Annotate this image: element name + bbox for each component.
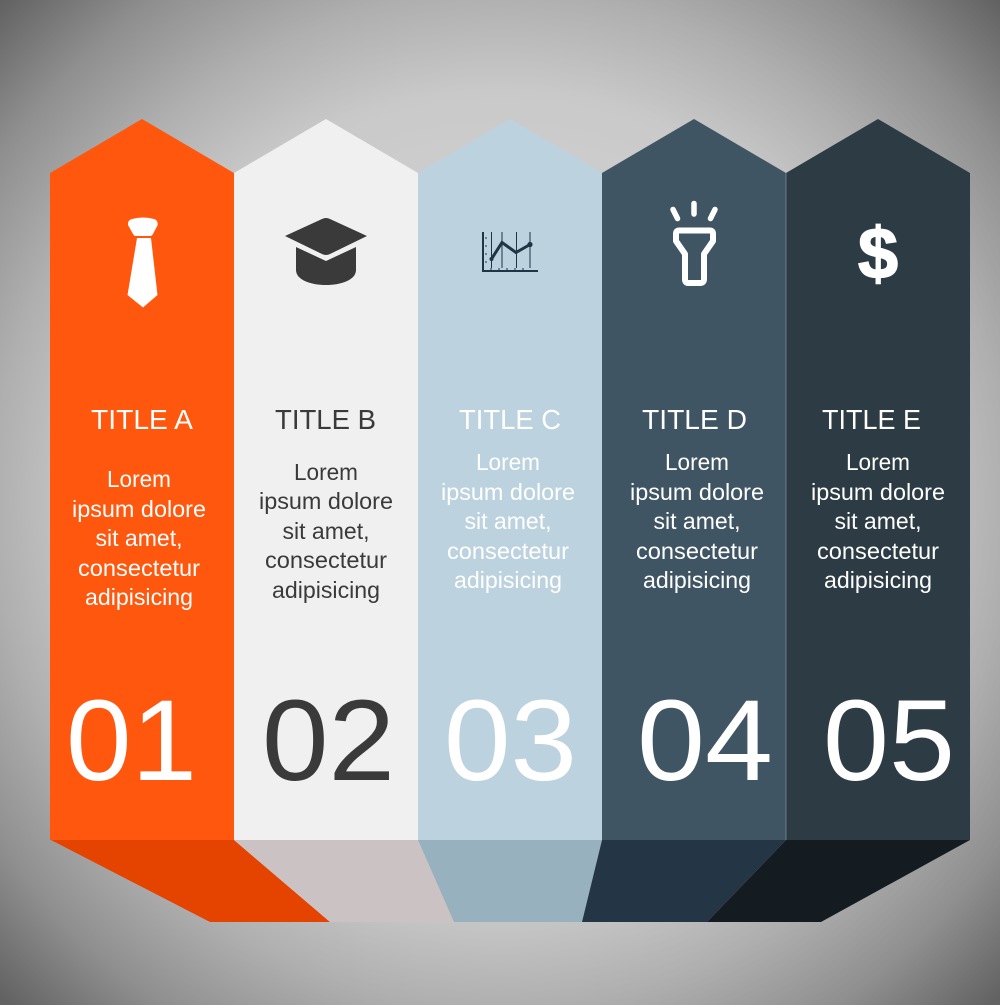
panel: step 02 — [234, 119, 454, 922]
base: muted blue — [418, 840, 602, 922]
icon: necktie — [128, 218, 158, 308]
text block: step 05 body: adipisicing — [824, 567, 932, 593]
shape: light column — [234, 119, 418, 840]
heading: title E: TITLE E — [822, 404, 921, 435]
icon: graduation cap — [285, 218, 367, 285]
text block: step 05 body: ipsum dolore — [811, 479, 945, 505]
icon: flashlight — [673, 204, 715, 283]
text block: step 01 body: ipsum dolore — [72, 496, 206, 522]
text block: step 05 body: consectetur — [817, 538, 939, 564]
text block: step 05 body — [811, 449, 945, 593]
text block: step 03 body: sit amet, — [464, 508, 552, 534]
base: near black — [707, 840, 970, 922]
text block: step 03 body: consectetur — [447, 538, 569, 564]
heading: title A: TITLE A — [91, 404, 193, 435]
icon: line chart — [483, 232, 538, 271]
number: 03: 03 — [444, 677, 577, 805]
number: 02: 02 — [262, 677, 395, 805]
text block: step 05 body: Lorem — [846, 449, 910, 475]
number: 05: 05 — [823, 677, 955, 805]
base: warm gray — [234, 840, 454, 922]
heading: title B: TITLE B — [275, 404, 376, 435]
text block: step 05 body: sit amet, — [834, 508, 922, 534]
number: 04: 04 — [637, 677, 773, 805]
text block: step 02 body — [259, 459, 393, 603]
text block: step 03 body: adipisicing — [454, 567, 562, 593]
text block: step 04 body: Lorem — [665, 449, 729, 475]
panel: step 04 — [582, 119, 786, 922]
text block: step 01 body: adipisicing — [85, 584, 193, 610]
shape: orange column — [50, 119, 234, 840]
text block: step 01 body: sit amet, — [96, 525, 182, 551]
text block: step 03 body — [441, 449, 575, 593]
text block: step 02 body: sit amet, — [282, 518, 370, 544]
text block: step 01 body — [72, 466, 206, 610]
icon: dollar sign: $ — [858, 214, 898, 294]
text block: step 01 body: consectetur — [78, 555, 200, 581]
text block: step 04 body: ipsum dolore — [630, 479, 764, 505]
text block: step 04 body — [630, 449, 764, 593]
text block: step 02 body: ipsum dolore — [259, 488, 393, 514]
text block: step 02 body: adipisicing — [272, 577, 380, 603]
base: dark slate — [582, 840, 786, 922]
text block: step 04 body: sit amet, — [654, 508, 740, 534]
shape: pale blue column — [418, 119, 602, 840]
shape: slate column — [602, 119, 786, 840]
panel: step 03 — [418, 119, 602, 922]
heading: title C: TITLE C — [459, 404, 561, 435]
panel: step 01 — [50, 119, 330, 922]
text block: step 04 body: adipisicing — [643, 567, 751, 593]
text block: step 01 body: Lorem — [107, 466, 171, 492]
text block: step 03 body: Lorem — [476, 449, 540, 475]
panel: step 05 — [707, 119, 970, 922]
shape: charcoal column — [786, 119, 970, 840]
base: orange — [51, 840, 330, 922]
number: 01: 01 — [66, 677, 197, 805]
text block: step 04 body: consectetur — [636, 538, 758, 564]
text block: step 03 body: ipsum dolore — [441, 479, 575, 505]
text block: step 02 body: consectetur — [265, 547, 387, 573]
text block: step 02 body: Lorem — [294, 459, 358, 485]
heading: title D: TITLE D — [642, 404, 747, 435]
